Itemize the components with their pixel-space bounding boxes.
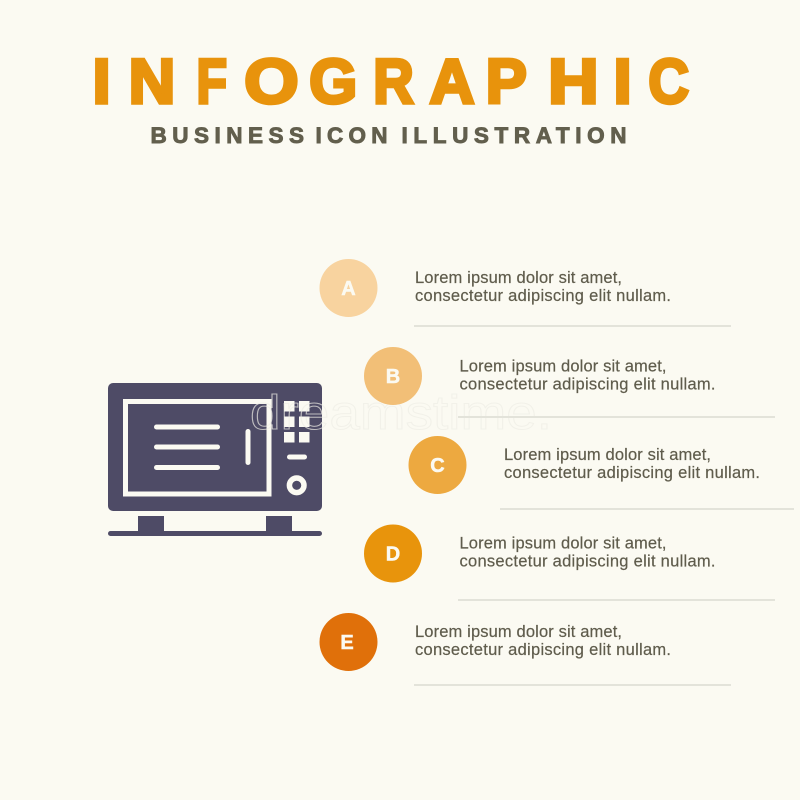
title bbox=[92, 47, 689, 117]
title: O bbox=[244, 47, 299, 117]
title: C bbox=[648, 47, 689, 117]
item E bbox=[320, 613, 731, 686]
title: P bbox=[486, 47, 527, 117]
item A bbox=[320, 259, 731, 327]
item D: consectetur adipiscing elit nullam. bbox=[460, 552, 716, 570]
item C: Lorem ipsum dolor sit amet, bbox=[504, 446, 711, 464]
item D bbox=[364, 524, 775, 601]
item B: Lorem ipsum dolor sit amet, bbox=[460, 358, 666, 376]
item B: B bbox=[386, 366, 400, 388]
item A: consectetur adipiscing elit nullam. bbox=[415, 287, 671, 305]
title: I bbox=[92, 47, 111, 117]
item E: Lorem ipsum dolor sit amet, bbox=[415, 623, 622, 641]
title: I bbox=[614, 47, 632, 117]
item B bbox=[364, 347, 775, 418]
title: A bbox=[430, 47, 474, 117]
icon: microwave bbox=[108, 383, 322, 536]
item B: consectetur adipiscing elit nullam. bbox=[460, 376, 716, 394]
item E: E bbox=[340, 632, 354, 654]
title: R bbox=[373, 47, 414, 117]
title: N bbox=[129, 47, 175, 117]
item C: consectetur adipiscing elit nullam. bbox=[504, 464, 760, 482]
title: H bbox=[548, 47, 599, 117]
title: F bbox=[196, 47, 227, 117]
subtitle: ILLUSTRATION bbox=[402, 123, 626, 148]
subtitle: ICON bbox=[316, 123, 388, 148]
subtitle bbox=[150, 123, 626, 148]
item C bbox=[408, 436, 794, 510]
item E: consectetur adipiscing elit nullam. bbox=[415, 641, 671, 659]
item D: D bbox=[386, 544, 400, 566]
item C: C bbox=[430, 455, 445, 477]
subtitle: BUSINESS bbox=[150, 123, 304, 148]
item D: Lorem ipsum dolor sit amet, bbox=[460, 534, 666, 552]
watermark: dreamstime. bbox=[250, 387, 552, 440]
title: G bbox=[309, 47, 357, 117]
item A: A bbox=[341, 278, 356, 300]
item A: Lorem ipsum dolor sit amet, bbox=[415, 269, 622, 287]
